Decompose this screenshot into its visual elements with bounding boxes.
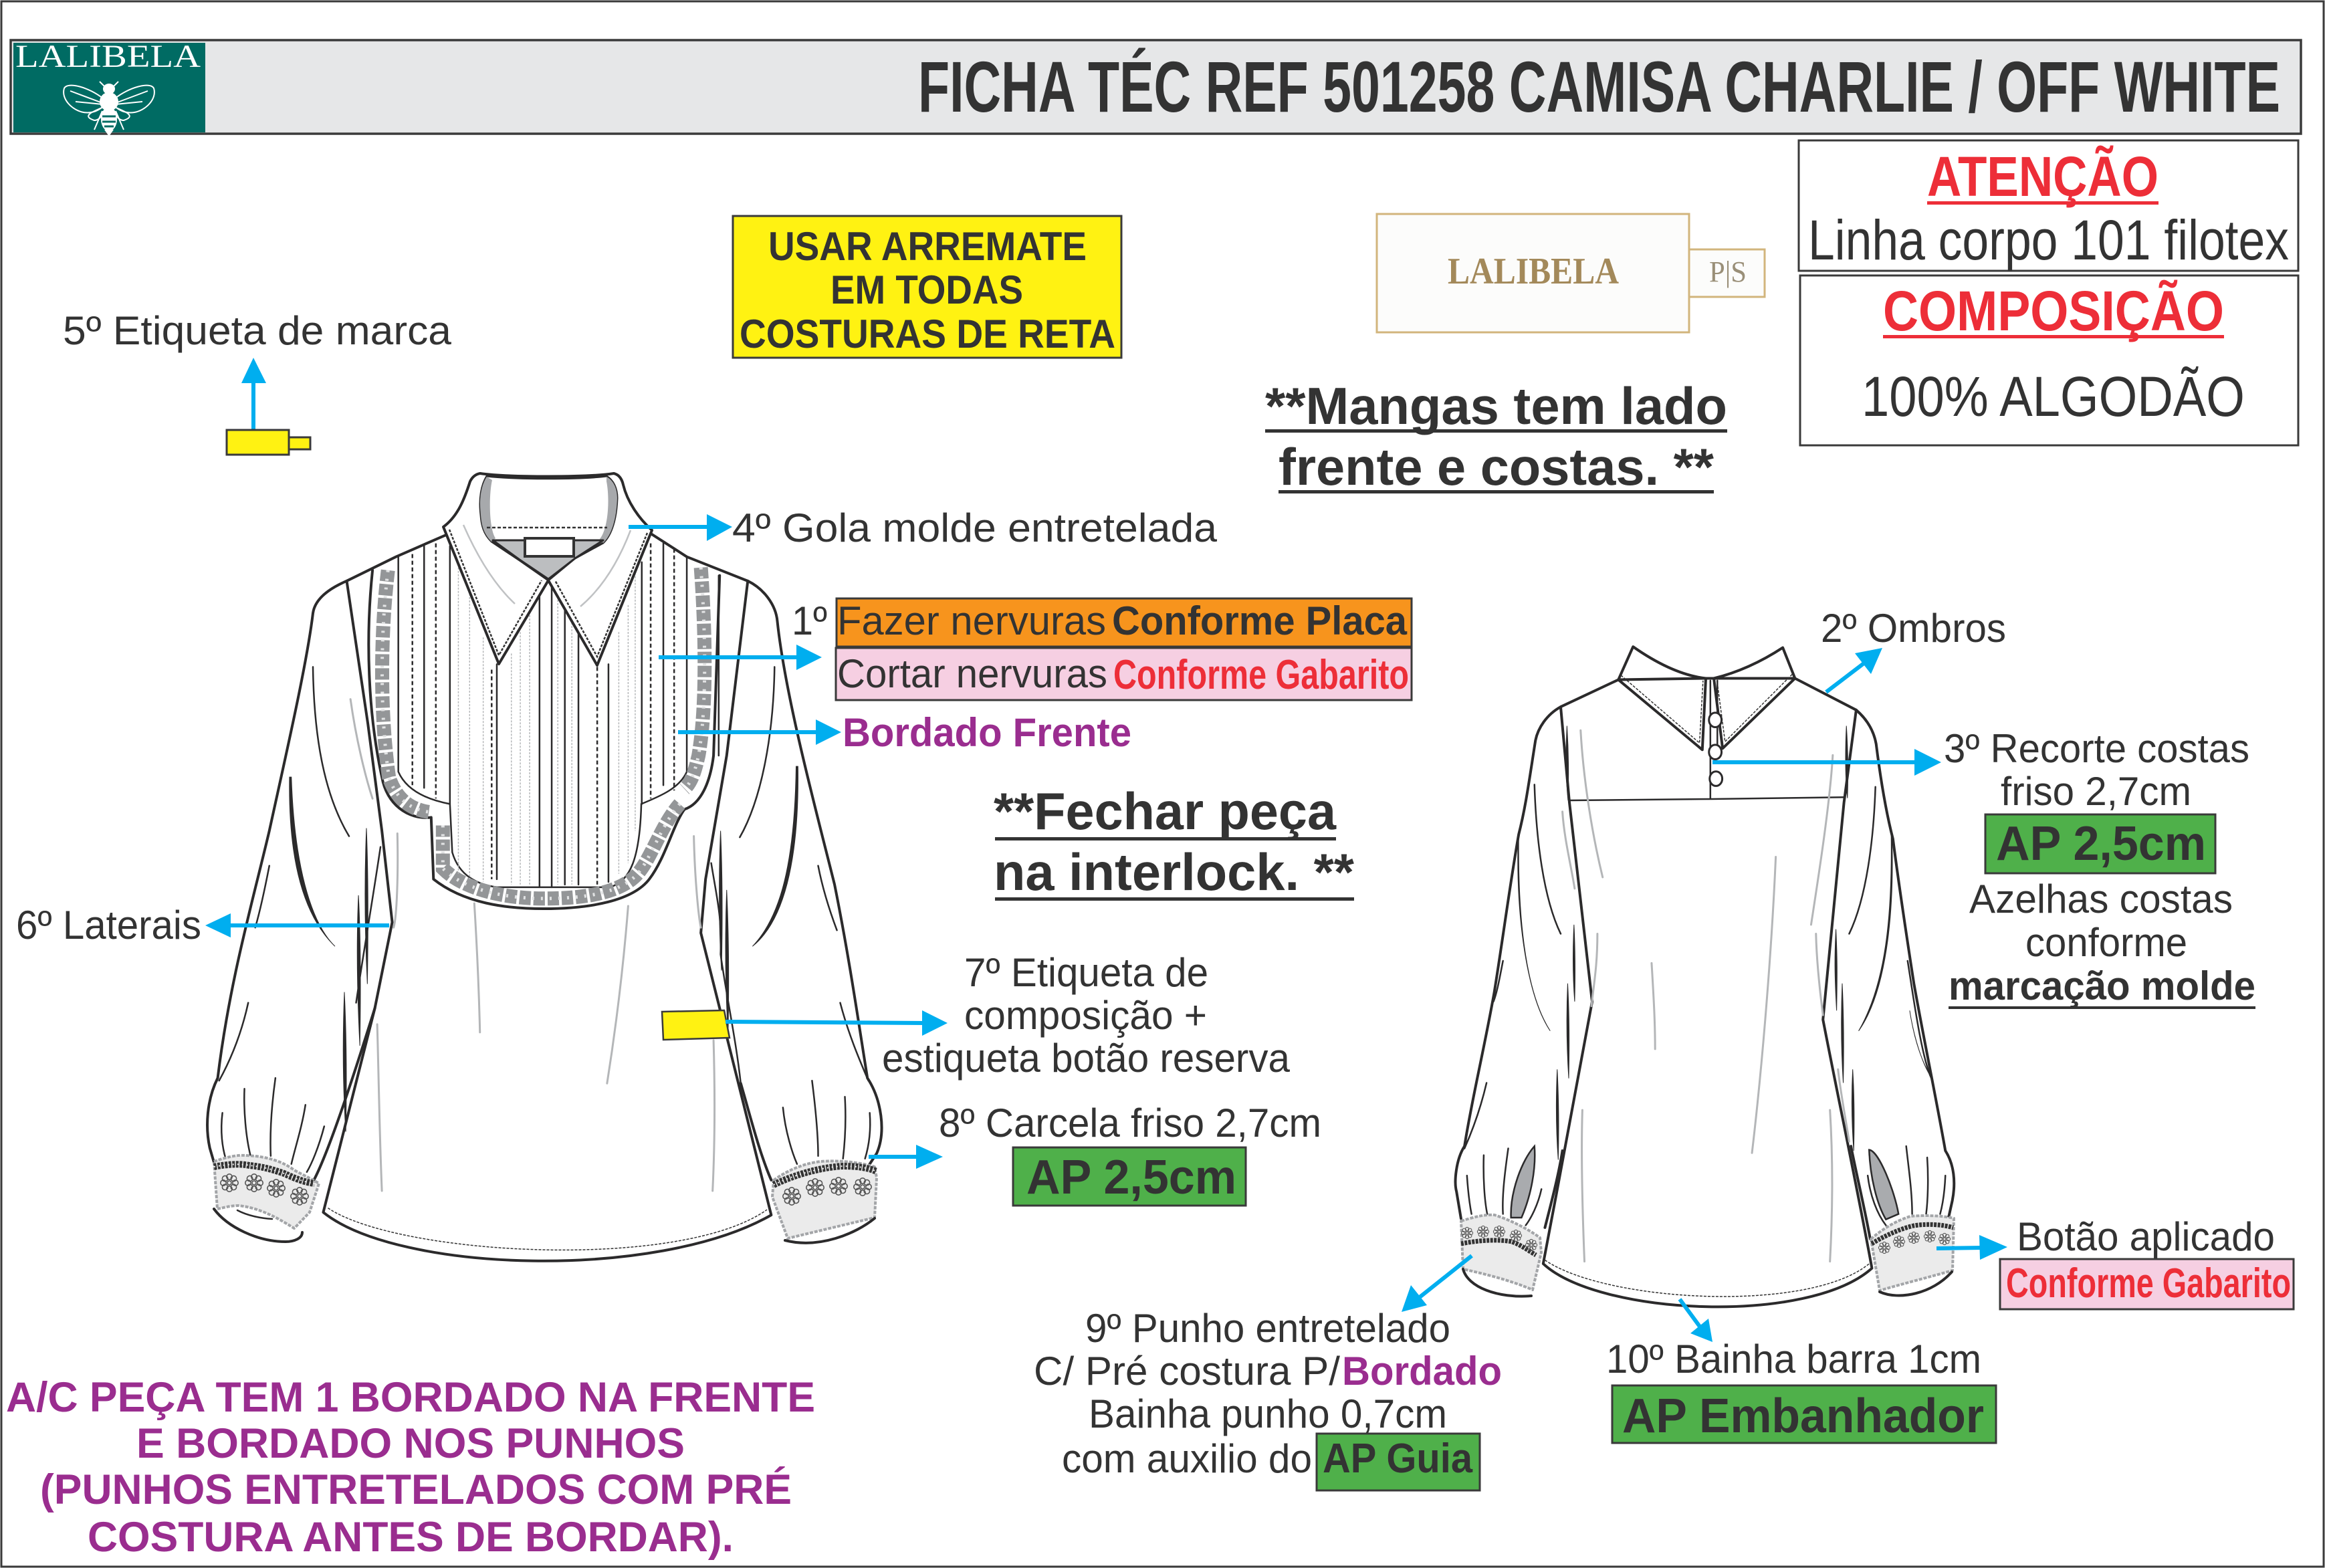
bib outline [368, 570, 719, 909]
arrow: laterais [205, 913, 389, 937]
note: bordado na frente e punhos: COSTURA ANTES DE BORDAR). [88, 1514, 734, 1561]
arrow: botão [1936, 1235, 2007, 1260]
note: mangas: **Mangas tem lado [1265, 376, 1727, 435]
callout: usar arremate [733, 216, 1121, 358]
gray sleeve slits [1511, 1146, 1898, 1220]
orange box: fazer nervuras: Conforme Placa [1112, 598, 1408, 643]
label: bordado frente [678, 710, 1131, 755]
right back cuff [1871, 1216, 1954, 1296]
note: fechar peça: na interlock. ** [994, 843, 1355, 901]
arrow: bordado [678, 719, 841, 745]
note: bordado na frente e punhos: (PUNHOS ENTRETELADOS COM PRÉ [40, 1466, 792, 1513]
label 1: nervuras: 1º [792, 598, 827, 643]
left back cuff [1461, 1215, 1541, 1297]
label 2: ombros [1821, 606, 2006, 692]
brand label image: P|S [1709, 255, 1747, 288]
label 9: punho [1034, 1256, 1502, 1490]
yoke seam [1569, 797, 1845, 800]
arrow: ombros [1826, 648, 1882, 692]
note: fechar peça [994, 782, 1355, 901]
label 7: etiqueta de composição: composição + [964, 993, 1207, 1038]
collar tag [525, 538, 574, 556]
label: botão aplicado [1936, 1214, 2294, 1309]
label 9: punho: com auxilio do [1062, 1436, 1312, 1481]
logo: Lalibela bee [13, 39, 205, 135]
label 6: laterais [16, 903, 389, 947]
panel: composição: COMPOSIÇÃO [1883, 279, 2224, 342]
text: azelhas costas: Azelhas costas [1969, 877, 2233, 921]
buttons [1709, 713, 1723, 786]
back garment drawing [1456, 647, 1954, 1307]
panel: atenção [1799, 140, 2298, 271]
badge: AP Embanhador: AP Embanhador [1622, 1389, 1984, 1443]
arrow: punho [1402, 1256, 1472, 1312]
collar [443, 473, 652, 665]
label 8: carcela: 8º Carcela friso 2,7cm [939, 1101, 1321, 1145]
label 3: recorte costas: friso 2,7cm [2001, 769, 2191, 814]
pink box: cortar nervuras [836, 648, 1412, 700]
label: bordado frente: Bordado Frente [843, 710, 1131, 755]
panel: composição: 100% ALGODÃO [1862, 365, 2245, 428]
text: azelhas costas: conforme [2025, 920, 2187, 965]
label 2: ombros: 2º Ombros [1821, 606, 2006, 651]
label 8: carcela [869, 1101, 1321, 1206]
note: bordado na frente e punhos: E BORDADO NOS PUNHOS [136, 1420, 685, 1467]
arrow: nervuras [659, 645, 822, 670]
label 9: punho: C/ Pré costura P/ [1034, 1349, 1340, 1393]
callout: usar arremate: EM TODAS [831, 267, 1023, 312]
orange box: fazer nervuras [837, 598, 1412, 647]
label 1: nervuras [659, 598, 1412, 700]
label 7: etiqueta de composição: estiqueta botão reserva [882, 1036, 1291, 1081]
label 7: etiqueta de composição [662, 950, 1291, 1081]
badge: AP Guia: AP Guia [1323, 1436, 1472, 1482]
label 9: punho: Bordado [1342, 1349, 1502, 1393]
note: fechar peça: **Fechar peça [994, 782, 1337, 841]
label 3: recorte costas [1712, 726, 2255, 1009]
icon: brand tag [227, 430, 310, 455]
panel: atenção: ATENÇÃO [1927, 145, 2158, 208]
label 5: etiqueta de marca: 5º Etiqueta de marca [63, 308, 452, 353]
left cuff [214, 1155, 319, 1242]
label 4: gola: 4º Gola molde entretelada [732, 506, 1218, 550]
arrow: gola [629, 514, 732, 541]
brand label image [1377, 214, 1765, 332]
brand label image: LALIBELA [1448, 251, 1619, 292]
icon: composition tag [662, 1010, 730, 1040]
label 10: bainha barra [1606, 1299, 1996, 1443]
arrow: bainha [1680, 1299, 1712, 1342]
label 9: punho: Bainha punho 0,7cm [1089, 1391, 1447, 1436]
right cuff [772, 1161, 877, 1243]
badge: AP 2,5cm: AP 2,5cm [1026, 1151, 1236, 1204]
note: mangas [1265, 376, 1727, 496]
text: azelhas costas [1949, 877, 2255, 1009]
note: mangas: frente e costas. ** [1279, 437, 1714, 496]
label 10: bainha barra: 10º Bainha barra 1cm [1606, 1337, 1981, 1381]
callout: usar arremate: COSTURAS DE RETA [740, 312, 1115, 356]
note: bordado na frente e punhos: A/C PEÇA TEM 1 BORDADO NA FRENTE [6, 1374, 815, 1421]
arrow: carcela [869, 1145, 943, 1169]
note: bordado na frente e punhos [6, 1374, 815, 1561]
label 7: etiqueta de composição: 7º Etiqueta de [964, 950, 1208, 995]
collar flaps [1618, 647, 1706, 750]
badge: AP 2,5cm: AP 2,5cm [1996, 817, 2206, 871]
callout: usar arremate: USAR ARREMATE [768, 224, 1087, 269]
orange box: fazer nervuras: Fazer nervuras [837, 598, 1106, 643]
label 6: laterais: 6º Laterais [16, 903, 201, 947]
panel: composição [1800, 275, 2298, 445]
label 9: punho: 9º Punho entretelado [1085, 1306, 1450, 1351]
arrow: up to label 5 [241, 358, 266, 429]
label: botão aplicado: Botão aplicado [2017, 1214, 2275, 1259]
header bar [11, 39, 2301, 135]
arrow: recorte [1712, 749, 1941, 776]
pleats [424, 544, 719, 887]
text: azelhas costas: marcação molde [1949, 964, 2255, 1008]
pink box: cortar nervuras: Cortar nervuras [837, 651, 1107, 696]
lace embroidery [382, 568, 705, 899]
logo: Lalibela bee: LALIBELA [15, 39, 201, 74]
arrow: composição [726, 1010, 948, 1036]
pink box: cortar nervuras: Conforme Gabarito [1113, 652, 1409, 698]
front garment drawing [207, 473, 882, 1261]
label 3: recorte costas: 3º Recorte costas [1944, 726, 2249, 771]
label 5: etiqueta de marca [63, 308, 452, 455]
